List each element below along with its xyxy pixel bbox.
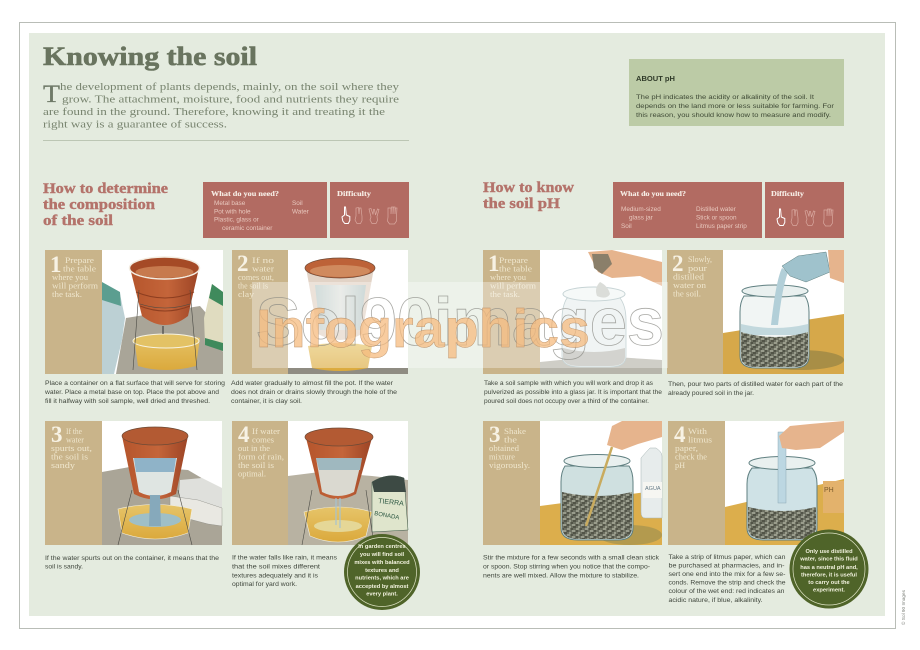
caption: pH 4: conds. Remove the strip and check the xyxy=(668,580,786,586)
caption: composition 3: soil is sandy. xyxy=(45,564,83,570)
panel: what do you need (pH): Soil xyxy=(621,223,632,230)
caption: pH 4: colour of the wet end: red indicates an xyxy=(668,588,785,595)
caption: pH 4: Take a strip of litmus paper, which can xyxy=(668,554,786,561)
caption: pH 1: poured soil does not occupy over a third of the container. xyxy=(484,398,649,405)
step card: pH 2 xyxy=(667,250,844,374)
callout: garden centres circle xyxy=(344,534,420,610)
step card: pH 2: water on xyxy=(673,281,706,290)
callout: distilled water circle: to carry out the xyxy=(808,580,850,586)
step card: pH 1: where you xyxy=(490,273,526,282)
callout: distilled water circle xyxy=(790,530,868,608)
step card: pH 4: paper, xyxy=(675,444,698,453)
caption: composition 1: water. Place a metal base on top. Place the pot above and xyxy=(44,389,219,396)
caption: composition 4: textures adequately and it is xyxy=(232,572,319,580)
panel: what do you need (pH): Medium-sized xyxy=(621,206,661,213)
caption: composition 2: container, it is clay soil. xyxy=(231,398,302,405)
step card: composition 2: If no xyxy=(252,256,274,265)
step card: pH 3: mixture xyxy=(489,452,515,462)
step card: composition 1: 1 xyxy=(50,252,62,277)
caption: pH 1: Take a soil sample with which you will work and drop it as xyxy=(484,380,654,387)
panel: what do you need (composition): Metal base xyxy=(214,200,246,207)
step card: pH 1 xyxy=(483,250,662,374)
illustration: water falling like rain with soil bag: BONADA xyxy=(374,511,400,521)
caption: pH 3: Stir the mixture for a few seconds with a small clean stick xyxy=(483,554,660,562)
step card: composition 1: the table xyxy=(63,264,97,274)
panel: difficulty (pH): Difficulty xyxy=(771,190,805,198)
illustration: dropping soil into glass jar xyxy=(540,250,662,374)
heading: composition of the soil: the composition xyxy=(43,197,156,213)
step card: pH 2: Slowly, xyxy=(688,255,712,264)
panel: what do you need (composition) xyxy=(203,182,327,238)
callout: garden centres circle: nutrients, which are xyxy=(355,576,409,582)
panel: what do you need (pH) xyxy=(613,182,762,238)
panel: what do you need (composition): Pot with hole xyxy=(214,208,251,216)
illustration: water spurting from pot xyxy=(102,427,222,545)
panel: difficulty (pH) xyxy=(765,182,844,238)
caption: pH 4: sert one end into the mix for a few se- xyxy=(668,571,786,578)
caption: composition 1 xyxy=(44,380,225,405)
heading: composition of the soil xyxy=(43,181,168,229)
illustration: litmus paper in jar xyxy=(725,421,844,545)
caption: pH 3: or spoon. Stop stirring when you notice that the compo- xyxy=(483,564,650,570)
caption: composition 2: Add water gradually to almost fill the pot. If the water xyxy=(231,380,394,387)
caption: pH 3 xyxy=(483,554,660,580)
caption: composition 3: If the water spurts out on the container, it means that the xyxy=(45,555,219,562)
step card: composition 2: the soil is xyxy=(238,282,268,290)
caption: pH 1 xyxy=(484,380,662,405)
step card: composition 3 xyxy=(45,421,222,545)
heading: composition of the soil: of the soil xyxy=(43,213,113,229)
step card: pH 4: With xyxy=(688,427,707,436)
caption: pH 2: Then, pour two parts of distilled water for each part of the xyxy=(668,381,843,388)
illustration: stirring the jar: AGUA xyxy=(645,486,661,492)
step card: pH 1: 1 xyxy=(488,251,500,276)
panel: difficulty (composition): Difficulty xyxy=(337,190,372,198)
panel: what do you need (composition): Soil xyxy=(292,200,303,207)
caption: composition 4: If the water falls like rain, it means xyxy=(232,554,338,562)
step card: pH 3: obtained xyxy=(489,444,519,453)
caption: composition 1: fill it halfway with soil sample, well dried and threshed. xyxy=(45,398,210,405)
caption: pH 2 xyxy=(668,381,843,397)
step card: pH 4: check the xyxy=(675,452,707,462)
callout: distilled water circle: water, since this fluid xyxy=(799,556,858,562)
step card: composition 2 xyxy=(232,250,408,374)
caption: composition 3 xyxy=(45,555,219,570)
step card: composition 3: spurts out, xyxy=(51,444,92,453)
step card: composition 3: sandy xyxy=(51,461,75,470)
callout: distilled water circle: Only use distilled xyxy=(805,549,853,555)
callout: garden centres circle: accepted by almost xyxy=(356,584,408,590)
caption: pH 3: nents are well mixed. Allow the mixture to stabilize. xyxy=(483,572,639,580)
step card: composition 4: comes xyxy=(252,436,274,444)
callout: garden centres circle: textures and xyxy=(365,568,399,574)
step card: composition 3: water xyxy=(66,436,84,444)
callout: about pH: ABOUT pH xyxy=(636,74,675,83)
step card: pH 4: litmus xyxy=(688,436,712,444)
step card: pH 2: 2 xyxy=(672,251,684,276)
panel: difficulty (composition) xyxy=(330,182,409,238)
illustration: litmus paper in jar: PH xyxy=(824,487,834,494)
step card: pH 2: pour xyxy=(688,264,707,273)
caption: composition 4: that the soil mixes different xyxy=(232,564,320,570)
step card: composition 4: optimal. xyxy=(238,470,266,478)
illustration: water falling like rain with soil bag: TIERRA xyxy=(378,498,404,508)
panel: what do you need (composition): Plastic, glass or xyxy=(214,216,260,224)
caption: composition 4: optimal for yard work. xyxy=(232,581,297,588)
caption: composition 2 xyxy=(231,380,397,405)
step card: pH 3: 3 xyxy=(489,422,500,447)
callout: distilled water circle: experiment. xyxy=(813,588,845,594)
step card: composition 1: Prepare xyxy=(65,256,95,265)
step card: pH 1: Prepare xyxy=(499,256,529,265)
icon: difficulty hands, one highlighted xyxy=(777,209,833,226)
illustration: pot on stand over bowl xyxy=(102,257,223,374)
step card: pH 2: the soil. xyxy=(673,290,701,298)
caption: pH 4: acidic nature, if blue, alkalinity. xyxy=(668,597,763,604)
intro paragraph: grow. The attachment, moisture, food and nutrients they require xyxy=(62,94,399,106)
panel: what do you need (pH): Stick or spoon xyxy=(696,214,737,222)
caption: composition 4 xyxy=(232,554,338,588)
panel: what do you need (pH): Litmus paper strip xyxy=(696,223,747,230)
callout: garden centres circle: every plant. xyxy=(366,592,398,598)
callout: about pH: The pH indicates the acidity or alkalinity of the soil. It xyxy=(636,94,814,101)
caption: pH 1: pulverized as possible into a glass jar. It is important that the xyxy=(484,389,662,396)
step card: pH 4: pH xyxy=(675,461,685,470)
panel: what do you need (pH): What do you need? xyxy=(620,190,687,198)
callout: distilled water circle: has a neutral pH and, xyxy=(800,565,858,571)
step card: composition 4: out in the xyxy=(238,444,270,453)
panel: what do you need (pH): Distilled water xyxy=(696,206,737,213)
step card: composition 3: the soil is xyxy=(51,452,88,462)
illustration: water falling like rain with soil bag xyxy=(288,428,408,545)
heading: composition of the soil: How to determine xyxy=(43,181,168,197)
caption: composition 2: does not drain or drains slowly through the hole of the xyxy=(231,389,397,396)
heading: soil pH: How to know xyxy=(483,180,574,196)
step card: composition 2: water xyxy=(252,264,274,274)
callout: garden centres circle: you will find soil xyxy=(360,552,405,558)
step card: pH 2: distilled xyxy=(673,272,704,282)
panel: what do you need (composition): What do you need? xyxy=(211,190,280,198)
callout: about pH: depends on the land more or less suitable for farming. For xyxy=(636,103,835,110)
heading: soil pH xyxy=(483,180,574,212)
watermark: Sol90images xyxy=(256,284,664,360)
callout: about pH: this reason, you should know how to measure and modify. xyxy=(636,112,831,119)
step card: composition 1: will perform xyxy=(52,282,99,290)
step card: pH 3: Shake xyxy=(504,427,526,436)
step card: composition 4: form of rain, xyxy=(238,452,284,462)
title: Knowing the soil xyxy=(43,42,257,71)
callout: about pH xyxy=(629,59,844,126)
step card: composition 4: If water xyxy=(252,427,280,436)
caption: composition 1: Place a container on a flat surface that will serve for storing xyxy=(45,380,225,387)
step card: composition 3: 3 xyxy=(51,422,62,447)
step card: pH 3: the xyxy=(504,436,518,444)
callout: distilled water circle: therefore, it is useful xyxy=(801,572,857,578)
callout: garden centres circle: In garden centres xyxy=(358,544,406,550)
step card: pH 1: the table xyxy=(499,264,533,274)
step card: pH 1: the task. xyxy=(490,290,520,299)
illustration: stirring the jar xyxy=(540,421,662,545)
step card: pH 4: 4 xyxy=(674,422,686,447)
caption: pH 4: be purchased at pharmacies, and in- xyxy=(668,562,784,570)
intro paragraph: T xyxy=(43,81,60,108)
heading: soil pH: the soil pH xyxy=(483,196,560,212)
step card: composition 2: 2 xyxy=(237,251,248,276)
step card: composition 2: comes out, xyxy=(238,273,274,282)
intro paragraph: he development of plants depends, mainly, on the soil where they xyxy=(60,81,400,93)
step card: composition 1 xyxy=(45,250,223,374)
illustration: pot filled with water xyxy=(288,258,408,374)
step card: composition 1: where you xyxy=(52,273,88,282)
step card: pH 4 xyxy=(668,421,844,545)
callout: garden centres circle: mixes with balanced xyxy=(354,560,410,566)
step card: composition 3: If the xyxy=(66,427,82,436)
panel: what do you need (composition): ceramic container xyxy=(222,225,273,232)
step card: composition 4: 4 xyxy=(238,422,250,447)
intro paragraph xyxy=(43,81,400,130)
copyright: © Sol 90 Images xyxy=(900,589,907,625)
step card: composition 4 xyxy=(232,421,408,545)
step card: composition 1: the task. xyxy=(52,290,82,299)
icon: difficulty hands, one highlighted xyxy=(342,207,397,224)
step card: composition 2: clay xyxy=(238,290,254,299)
step card: pH 3: vigorously. xyxy=(489,461,530,470)
intro paragraph: are found in the ground. Therefore, knowing it and treating it the xyxy=(43,106,385,118)
watermark: Infographics xyxy=(256,299,590,359)
intro paragraph: right way is a guarantee of success. xyxy=(43,118,227,130)
caption: pH 2: already poured soil in the jar. xyxy=(668,390,754,397)
illustration: pouring distilled water into jar xyxy=(723,250,844,374)
step card: pH 3 xyxy=(483,421,662,545)
panel: what do you need (pH): glass jar xyxy=(629,214,654,222)
step card: pH 1: will perform xyxy=(490,282,537,290)
caption: pH 4 xyxy=(668,554,786,604)
panel: what do you need (composition): Water xyxy=(292,208,310,216)
step card: composition 4: the soil is xyxy=(238,461,274,470)
